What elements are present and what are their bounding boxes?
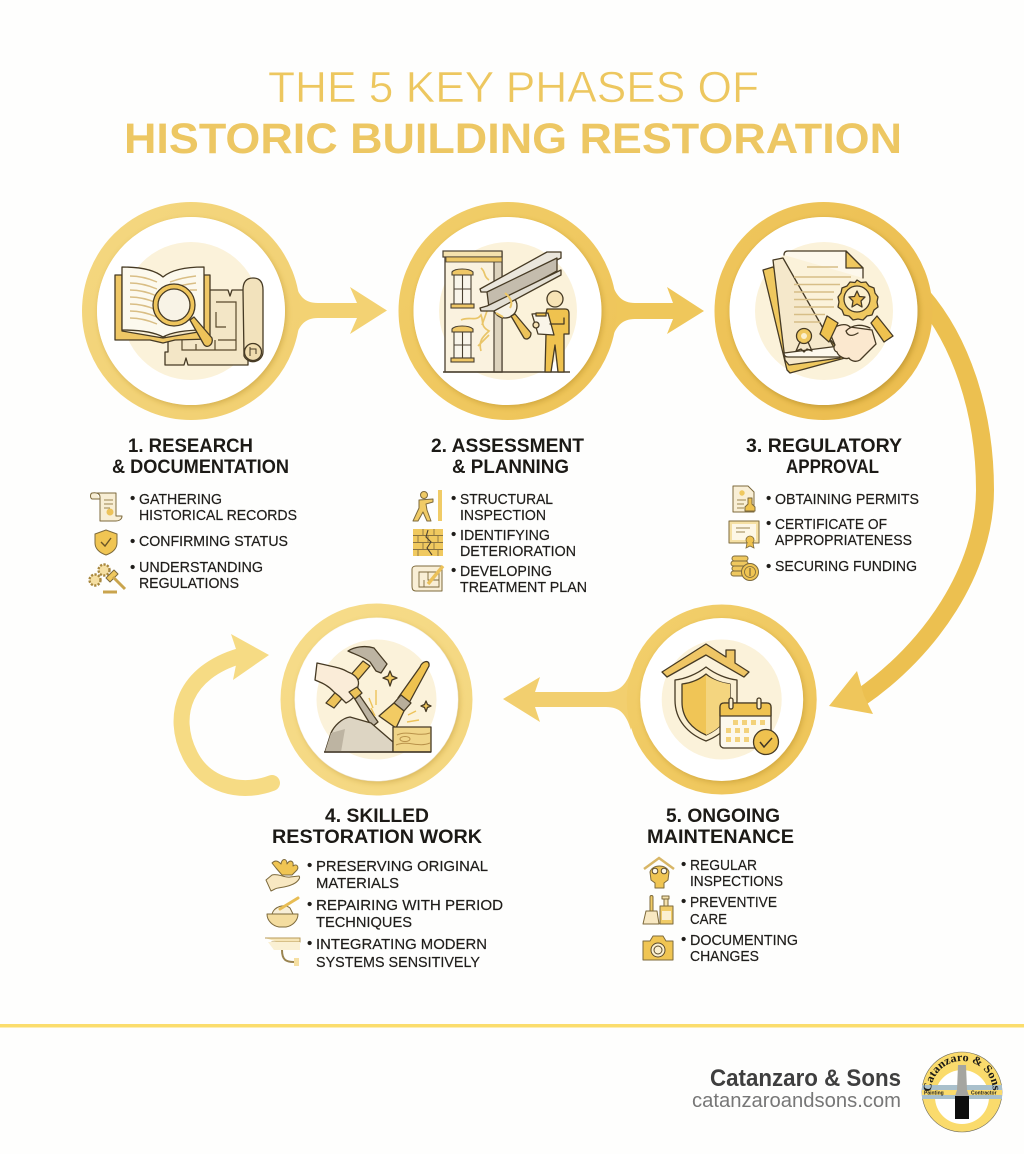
panel: phase 2 assessment and planning bbox=[406, 210, 609, 596]
list: phase 5 items: REGULAR bbox=[690, 857, 757, 874]
list: phase 3 items bbox=[766, 490, 919, 575]
icon: shield check bbox=[95, 530, 117, 555]
list: phase 5 items: • bbox=[681, 893, 686, 910]
heading: phase 1: 1. RESEARCH bbox=[128, 435, 253, 457]
ring: phase 3 bbox=[722, 210, 925, 412]
ring: phase 4 bbox=[288, 610, 466, 788]
list: phase 3 items: OBTAINING PERMITS bbox=[775, 491, 919, 508]
ring: phase 1 bbox=[90, 210, 292, 412]
list: phase 5 items: DOCUMENTING bbox=[690, 932, 798, 949]
list: phase 5 items: CHANGES bbox=[690, 948, 759, 965]
panel: phase 1 research and documentation bbox=[90, 210, 297, 592]
icon: scroll bbox=[90, 493, 122, 521]
icon: gears and gavel bbox=[90, 564, 125, 592]
ring: phase 2 bbox=[406, 210, 609, 412]
heading: phase 2 bbox=[431, 435, 584, 478]
footer divider bbox=[0, 1024, 1024, 1028]
list: phase 4 items: PRESERVING ORIGINAL bbox=[316, 858, 488, 875]
footer: company name: catanzaroandsons.com bbox=[692, 1090, 901, 1112]
footer: company logo bbox=[922, 1052, 1002, 1132]
list: phase 1 items: GATHERING bbox=[139, 491, 222, 508]
heading: phase 1: & DOCUMENTATION bbox=[112, 456, 289, 478]
heading: phase 5 bbox=[647, 805, 794, 848]
list: phase 1 items: CONFIRMING STATUS bbox=[139, 533, 288, 550]
list: phase 4 items: • bbox=[307, 896, 312, 913]
list: phase 5 items: PREVENTIVE bbox=[690, 894, 777, 911]
icon: building inspection bbox=[443, 251, 570, 372]
list: phase 4 items: SYSTEMS SENSITIVELY bbox=[316, 954, 480, 971]
list: phase 4 items: MATERIALS bbox=[316, 875, 399, 892]
icon: camera bbox=[643, 936, 673, 960]
list: phase 5 items: INSPECTIONS bbox=[690, 873, 783, 890]
icon: hand holding shell bbox=[266, 860, 300, 891]
icon: coins bbox=[731, 556, 758, 580]
heading: phase 4 bbox=[272, 805, 482, 848]
icon: house inspection bbox=[644, 858, 674, 888]
list: phase 2 items: • bbox=[451, 562, 456, 579]
list: phase 3 items: CERTIFICATE OF bbox=[775, 516, 887, 533]
list: phase 3 items: APPROPRIATENESS bbox=[775, 532, 912, 549]
heading: phase 3 bbox=[746, 435, 902, 478]
heading: phase 4: 4. SKILLED bbox=[325, 805, 429, 827]
arrow: phase 1 to phase 2 bbox=[294, 281, 387, 341]
list: phase 2 items: DEVELOPING bbox=[460, 563, 552, 580]
arrow: phase 2 to phase 3 bbox=[611, 281, 704, 341]
list: phase 5 items: • bbox=[681, 856, 686, 873]
list: phase 1 items bbox=[130, 490, 297, 592]
heading: phase 3: APPROVAL bbox=[786, 456, 879, 478]
footer: company logo: Painting bbox=[924, 1090, 944, 1096]
icon: mortar bowl and trowel bbox=[267, 898, 298, 927]
icon: permit stamp bbox=[733, 486, 755, 512]
heading: phase 2: & PLANNING bbox=[452, 456, 569, 478]
list: phase 5 items bbox=[681, 856, 798, 965]
list: phase 4 items: • bbox=[307, 935, 312, 952]
list: phase 2 items: • bbox=[451, 490, 456, 507]
icon: worker at wall bbox=[413, 490, 442, 521]
icon: book and blueprint bbox=[115, 267, 263, 365]
list: phase 4 items: REPAIRING WITH PERIOD bbox=[316, 897, 503, 914]
list: phase 5 items: • bbox=[681, 931, 686, 948]
heading: phase 3: 3. REGULATORY bbox=[746, 435, 902, 457]
footer: company name: Catanzaro & Sons bbox=[710, 1065, 901, 1092]
arrow: phase 4 loop bbox=[182, 634, 272, 788]
heading: phase 1 bbox=[112, 435, 289, 478]
list: phase 3 items: • bbox=[766, 490, 771, 507]
ring: phase 5 bbox=[634, 612, 810, 788]
heading: phase 2: 2. ASSESSMENT bbox=[431, 435, 584, 457]
list: phase 1 items: HISTORICAL RECORDS bbox=[139, 507, 297, 524]
list: phase 1 items: • bbox=[130, 533, 135, 550]
footer: company name bbox=[692, 1065, 901, 1112]
list: phase 1 items: UNDERSTANDING bbox=[139, 559, 263, 576]
list: phase 2 items: IDENTIFYING bbox=[460, 527, 550, 544]
list: phase 2 items: STRUCTURAL bbox=[460, 491, 553, 508]
list: phase 2 items bbox=[451, 490, 587, 596]
list: phase 4 items: • bbox=[307, 857, 312, 874]
list: phase 3 items: • bbox=[766, 515, 771, 532]
list: phase 1 items: REGULATIONS bbox=[139, 575, 239, 592]
title: HISTORIC BUILDING RESTORATION bbox=[124, 115, 902, 163]
heading: phase 4: RESTORATION WORK bbox=[272, 826, 482, 848]
arrow: phase 3 to phase 5 bbox=[829, 296, 985, 714]
icon: house shield and calendar bbox=[662, 644, 778, 754]
list: phase 2 items: TREATMENT PLAN bbox=[460, 579, 587, 596]
footer: company logo: Catanzaro & Sons bbox=[924, 1056, 998, 1091]
heading: phase 5: 5. ONGOING bbox=[666, 805, 780, 827]
icon: molding and pipe bbox=[265, 938, 300, 966]
panel: phase 4 skilled restoration work bbox=[265, 610, 503, 971]
list: phase 4 items bbox=[307, 857, 503, 971]
heading: phase 5: MAINTENANCE bbox=[647, 826, 794, 848]
list: phase 1 items: • bbox=[130, 559, 135, 576]
list: phase 2 items: • bbox=[451, 526, 456, 543]
list: phase 2 items: INSPECTION bbox=[460, 507, 546, 524]
arrow: phase 5 to phase 4 bbox=[503, 668, 632, 730]
panel: phase 5 ongoing maintenance bbox=[634, 612, 810, 965]
panel: phase 3 regulatory approval bbox=[722, 210, 925, 580]
list: phase 3 items: • bbox=[766, 558, 771, 575]
title bbox=[124, 63, 902, 163]
footer: company logo: Contractor bbox=[971, 1090, 997, 1096]
list: phase 2 items: DETERIORATION bbox=[460, 543, 576, 560]
list: phase 5 items: CARE bbox=[690, 911, 727, 928]
list: phase 3 items: SECURING FUNDING bbox=[775, 558, 917, 575]
icon: cracked brick wall bbox=[413, 529, 443, 556]
list: phase 4 items: INTEGRATING MODERN bbox=[316, 936, 487, 953]
icon: hammer chisel and brush bbox=[315, 647, 431, 752]
icon: certificate bbox=[729, 521, 759, 548]
list: phase 4 items: TECHNIQUES bbox=[316, 914, 412, 931]
icon: permit documents and handshake bbox=[763, 251, 893, 373]
title: THE 5 KEY PHASES OF bbox=[268, 63, 759, 112]
list: phase 1 items: • bbox=[130, 490, 135, 507]
icon: blueprint and pencil bbox=[412, 566, 443, 591]
icon: paint brush and bottle bbox=[643, 896, 673, 924]
